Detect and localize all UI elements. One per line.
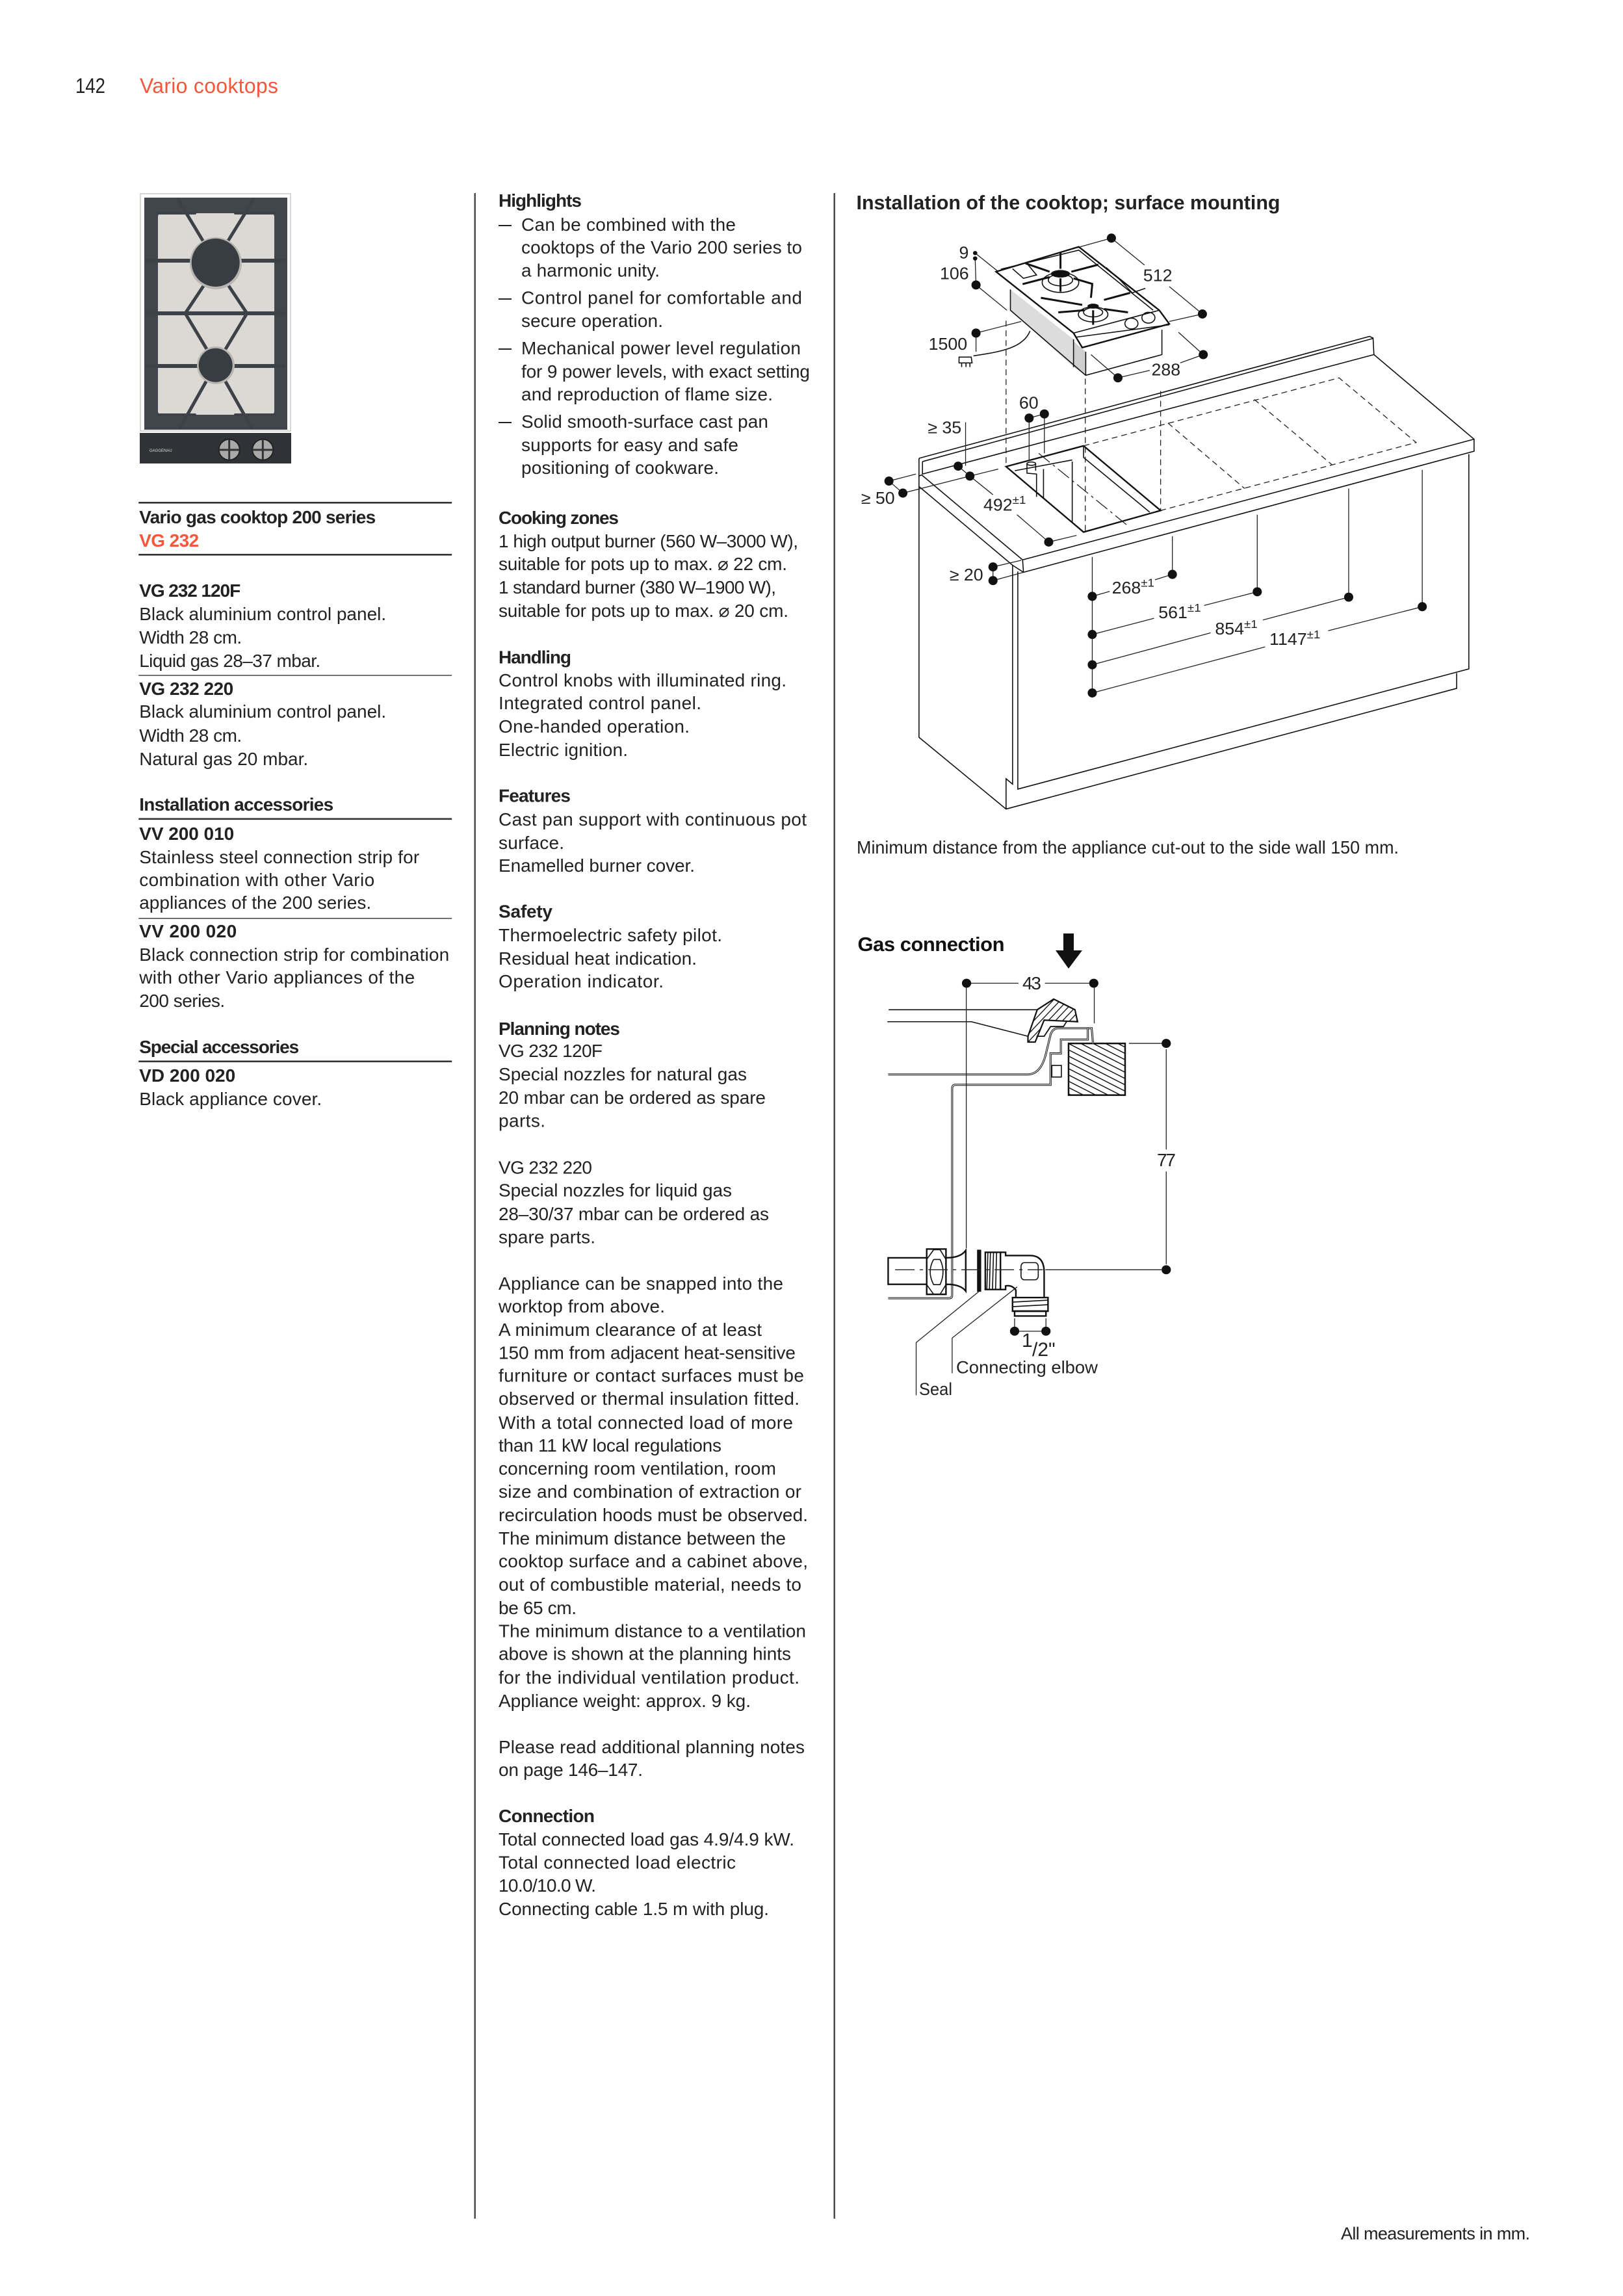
features: Cast pan support with continuous pot (499, 809, 807, 829)
gas diagram labels: 77 (1157, 1150, 1176, 1170)
planning notes: 20 mbar can be ordered as spare (499, 1088, 766, 1108)
features: Features (499, 785, 571, 806)
planning notes: Please read additional planning notes (499, 1737, 805, 1757)
gas diagram labels: 1 (1022, 1330, 1033, 1351)
dimension labels: ±1 (1307, 627, 1320, 641)
handling: Control knobs with illuminated ring. (499, 670, 786, 690)
planning notes: cooktop surface and a cabinet above, (499, 1551, 808, 1571)
dimension labels: 1147 (1269, 630, 1307, 649)
planning notes: for the individual ventilation product. (499, 1667, 799, 1688)
installation accessories: Stainless steel connection strip for (139, 847, 419, 867)
model VG 232 220: Width 28 cm. (139, 725, 242, 746)
dimension lines and leaders (916, 979, 1171, 1395)
dimension lines and dots (885, 233, 1427, 698)
diagram: gas connection section (887, 979, 1171, 1395)
planning notes: than 11 kW local regulations (499, 1435, 721, 1455)
planning notes: parts. (499, 1110, 545, 1131)
highlights: secure operation. (521, 311, 663, 331)
highlights: and reproduction of flame size. (521, 384, 773, 404)
highlights: Highlights (499, 190, 582, 211)
dimension labels: ≥ 50 (861, 489, 895, 508)
dashed appliance outlines (1006, 320, 1416, 532)
installation accessories: Black connection strip for combination (139, 945, 449, 965)
planning notes: size and combination of extraction or (499, 1481, 801, 1502)
dimension labels: 268 (1112, 578, 1141, 597)
gas diagram labels: Seal (919, 1379, 952, 1399)
arrow: installation direction (1056, 933, 1082, 969)
safety (499, 901, 722, 991)
cooking zones: suitable for pots up to max. ⌀ 22 cm. (499, 554, 787, 574)
planning notes: Planning notes (499, 1019, 620, 1039)
handling: Handling (499, 647, 571, 667)
model VG 232 220: Natural gas 20 mbar. (139, 749, 308, 769)
planning notes: VG 232 220 (499, 1157, 592, 1178)
special accessories: VD 200 020 (139, 1065, 235, 1086)
highlights: for 9 power levels, with exact setting (521, 361, 810, 382)
dimension labels: ±1 (1188, 601, 1201, 614)
highlights: Solid smooth-surface cast pan (521, 411, 768, 432)
handling: Electric ignition. (499, 740, 628, 760)
planning notes: spare parts. (499, 1227, 595, 1247)
worktop and cabinet (919, 336, 1474, 809)
dimension labels: 854 (1215, 620, 1244, 638)
highlights (499, 190, 810, 478)
installation accessories: with other Vario appliances of the (138, 967, 415, 987)
safety: Safety (499, 901, 552, 922)
planning notes: out of combustible material, needs to (499, 1574, 801, 1595)
installation accessories: VV 200 020 (139, 921, 237, 941)
pipe fitting (888, 1249, 1048, 1316)
heading: gas connection: Gas connection (858, 933, 1005, 956)
special accessories (138, 1037, 452, 1109)
connection: Connecting cable 1.5 m with plug. (499, 1899, 769, 1919)
dimension labels: ≥ 20 (950, 566, 983, 584)
connection: Connection (499, 1806, 595, 1826)
dimension labels: 288 (1152, 360, 1180, 379)
installation accessories: combination with other Vario (139, 870, 374, 890)
dimension labels: 60 (1019, 393, 1039, 412)
dimension labels: 1500 (929, 334, 967, 354)
model VG 232 120F (138, 581, 452, 676)
connection: 10.0/10.0 W. (499, 1875, 596, 1896)
cooking zones: Cooking zones (499, 508, 619, 528)
highlights: Mechanical power level regulation (521, 338, 801, 358)
heading: installation: Installation of the cooktop; surface mounting (857, 191, 1280, 214)
model VG 232 120F: VG 232 120F (139, 581, 240, 601)
model VG 232 220: Black aluminium control panel. (139, 701, 386, 722)
gas diagram labels: /2" (1032, 1339, 1056, 1361)
clip (1052, 1065, 1061, 1077)
installation accessories: VV 200 010 (139, 824, 234, 844)
special accessories: Special accessories (139, 1037, 299, 1057)
safety: Residual heat indication. (499, 948, 697, 969)
gas diagram labels: 43 (1022, 973, 1041, 993)
caption: minimum distance: Minimum distance from the appliance cut-out to the side wall 150 mm. (857, 837, 1399, 857)
dimension labels (861, 243, 1320, 649)
dimension labels: 512 (1143, 266, 1172, 285)
planning notes (498, 1019, 808, 1780)
planning notes: With a total connected load of more (499, 1413, 793, 1433)
model VG 232 220: VG 232 220 (139, 679, 233, 699)
installation accessories: 200 series. (139, 991, 225, 1011)
appliance cut-out (1006, 446, 1161, 532)
planning notes: 28–30/37 mbar can be ordered as (499, 1204, 769, 1224)
model VG 232 120F: Width 28 cm. (139, 627, 242, 647)
planning notes: Special nozzles for liquid gas (499, 1181, 732, 1200)
section title: Vario cooktops (140, 74, 278, 98)
planning notes: concerning room ventilation, room (499, 1459, 776, 1478)
installation accessories: Installation accessories (139, 794, 333, 815)
dimension labels: ±1 (1244, 617, 1258, 631)
planning notes: recirculation hoods must be observed. (499, 1505, 808, 1525)
gas diagram labels (919, 973, 1176, 1399)
planning notes: on page 146–147. (499, 1760, 643, 1780)
product heading (138, 502, 452, 556)
highlights: Control panel for comfortable and (521, 287, 802, 308)
planning notes: The minimum distance to a ventilation (499, 1621, 806, 1641)
model VG 232 220 (139, 679, 386, 769)
features: surface. (499, 833, 564, 853)
dimension labels: ±1 (1013, 493, 1026, 506)
connection: Total connected load gas 4.9/4.9 kW. (499, 1829, 794, 1849)
cooktop drawing (959, 247, 1169, 375)
handling: One-handed operation. (499, 716, 690, 737)
planning notes: A minimum clearance of at least (499, 1320, 762, 1340)
dimension labels: 492 (983, 495, 1013, 514)
highlights: positioning of cookware. (521, 458, 719, 478)
highlights: cooktops of the Vario 200 series to (521, 237, 802, 257)
gas diagram labels: Connecting elbow (956, 1357, 1098, 1377)
features: Enamelled burner cover. (499, 855, 695, 876)
dimension labels: 561 (1158, 603, 1188, 622)
planning notes: Appliance weight: approx. 9 kg. (499, 1691, 751, 1711)
dimension labels: ±1 (1141, 576, 1154, 590)
planning notes: above is shown at the planning hints (499, 1643, 791, 1664)
column dividers (474, 193, 835, 2219)
special accessories: Black appliance cover. (139, 1089, 322, 1109)
cooking zones: 1 high output burner (560 W–3000 W), (499, 531, 798, 551)
handling: Integrated control panel. (499, 693, 701, 713)
highlights: Can be combined with the (521, 215, 736, 235)
planning notes: Special nozzles for natural gas (499, 1064, 747, 1084)
dimension labels: 106 (940, 264, 969, 283)
highlights: a harmonic unity. (521, 260, 660, 281)
diagram: surface mounting installation (861, 233, 1474, 809)
sheet metal double lines (888, 1028, 1093, 1298)
cooking zones: 1 standard burner (380 W–1900 W), (499, 577, 776, 597)
installation accessories (138, 794, 452, 1011)
planning notes: VG 232 120F (499, 1041, 603, 1061)
cooking zones: suitable for pots up to max. ⌀ 20 cm. (499, 601, 788, 621)
cooking zones (499, 508, 798, 621)
connection: Total connected load electric (499, 1853, 736, 1872)
photo: gas cooktop (140, 194, 291, 463)
planning notes: The minimum distance between the (499, 1528, 786, 1548)
dimension labels: 9 (959, 243, 968, 262)
planning notes: worktop from above. (498, 1296, 665, 1316)
photo: gas cooktop: GAGGENAU (149, 449, 172, 453)
panel: specification column (498, 190, 810, 1919)
safety: Operation indicator. (499, 971, 664, 991)
dimension labels: ≥ 35 (928, 418, 961, 437)
model VG 232 120F: Liquid gas 28–37 mbar. (139, 651, 320, 671)
model VG 232 120F: Black aluminium control panel. (139, 604, 386, 624)
planning notes: 150 mm from adjacent heat-sensitive (499, 1343, 796, 1363)
safety: Thermoelectric safety pilot. (499, 925, 722, 945)
connection (499, 1806, 794, 1919)
panel: product column (138, 502, 452, 1109)
planning notes: furniture or contact surfaces must be (499, 1365, 804, 1386)
features (499, 785, 807, 876)
page number: 142 (75, 74, 105, 98)
worktop section hatched (1069, 1043, 1125, 1095)
highlights: supports for easy and safe (521, 435, 738, 455)
installation accessories: appliances of the 200 series. (139, 893, 371, 913)
planning notes: Appliance can be snapped into the (499, 1273, 783, 1294)
planning notes: observed or thermal insulation fitted. (499, 1389, 799, 1409)
planning notes: be 65 cm. (499, 1598, 577, 1618)
product heading: VG 232 (139, 530, 199, 551)
handling (499, 647, 786, 760)
cooktop edge section (887, 999, 1078, 1042)
footer note: All measurements in mm. (1341, 2224, 1530, 2243)
product heading: Vario gas cooktop 200 series (139, 507, 376, 527)
